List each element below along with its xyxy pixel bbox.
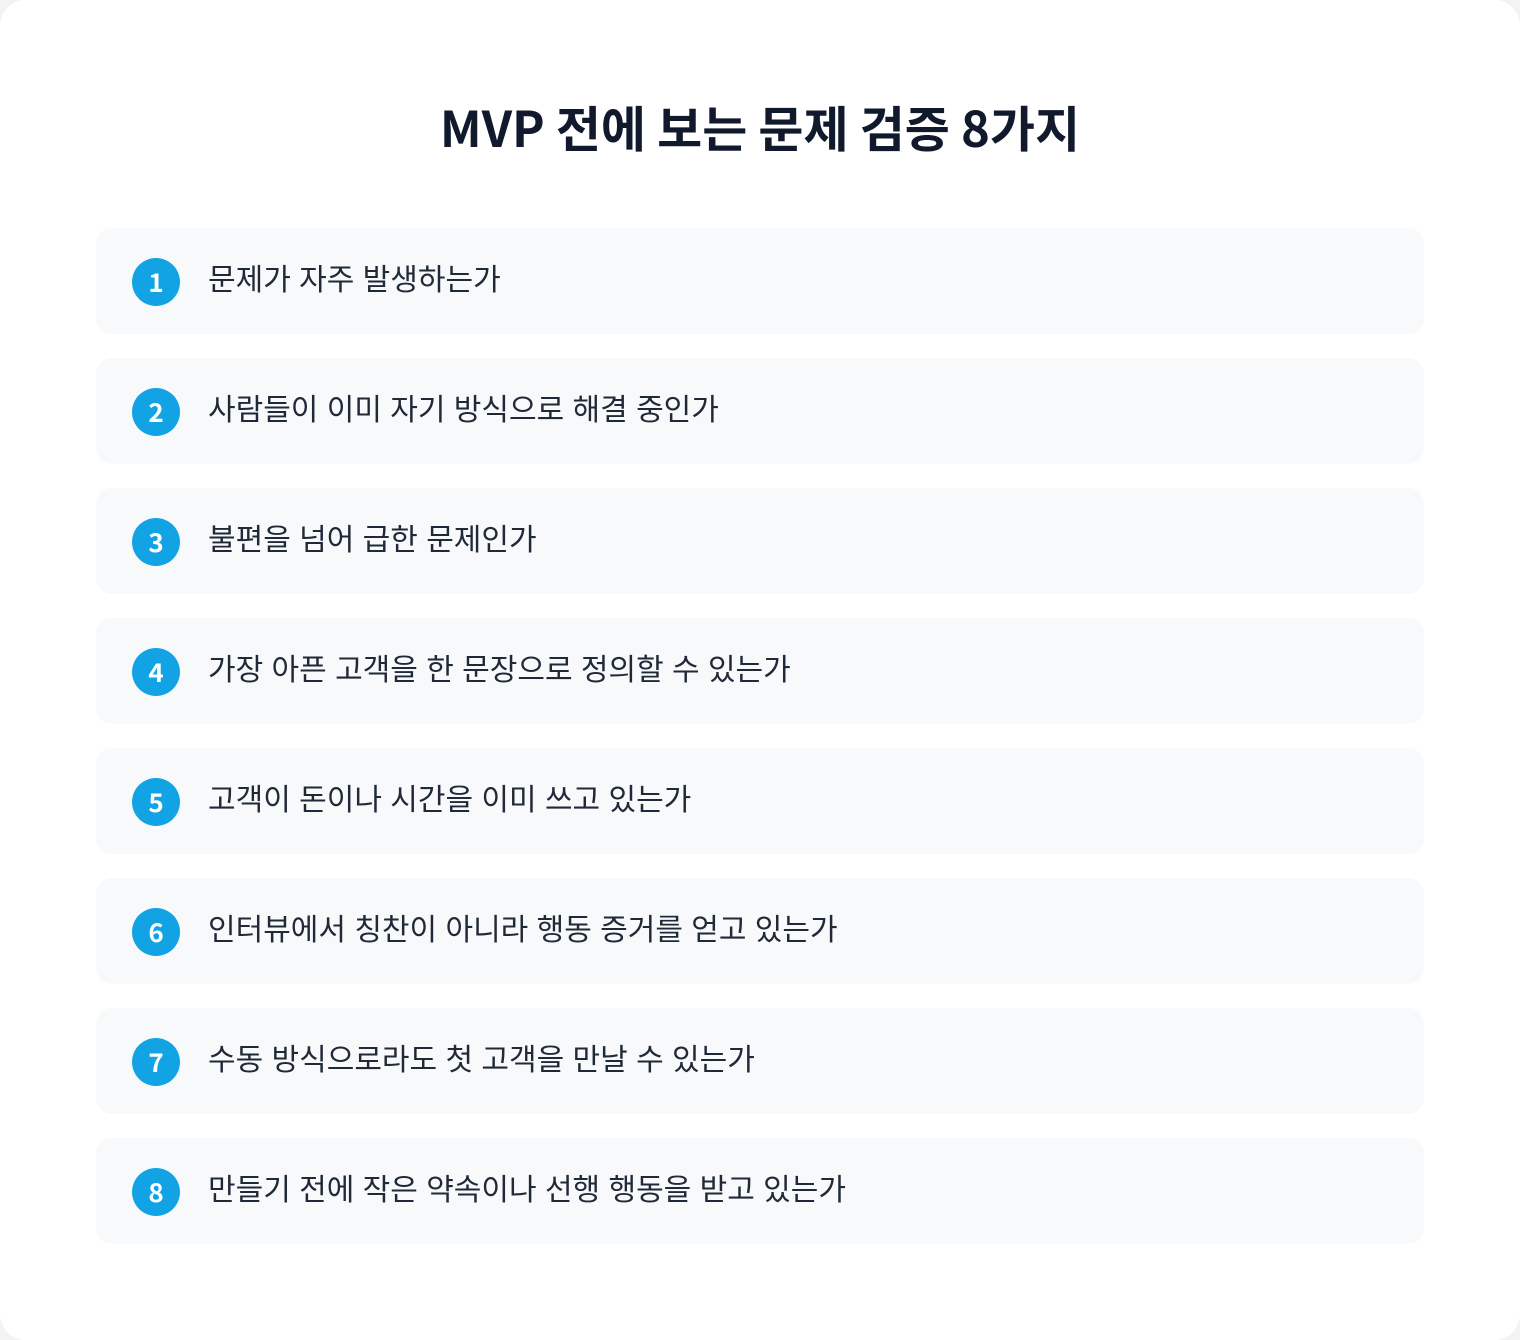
- item 5: 고객이 돈이나 시간을 이미 쓰고 있는가: [208, 784, 691, 817]
- item 7: 수동 방식으로라도 첫 고객을 만날 수 있는가: [208, 1044, 755, 1077]
- item 3: 3: [148, 523, 164, 560]
- item 6: [96, 878, 1424, 984]
- item 4: 4: [148, 653, 164, 690]
- item 4: [96, 618, 1424, 724]
- item 5: 5: [148, 783, 164, 820]
- item 1: 문제가 자주 발생하는가: [208, 264, 501, 297]
- item 2: 2: [148, 393, 164, 430]
- item 7: [96, 1008, 1424, 1114]
- item 2: [96, 358, 1424, 464]
- item 8: 만들기 전에 작은 약속이나 선행 행동을 받고 있는가: [208, 1174, 846, 1207]
- item 1: [96, 228, 1424, 334]
- item 8: 8: [148, 1173, 164, 1210]
- item 3: 불편을 넘어 급한 문제인가: [208, 524, 537, 557]
- item 8: [96, 1138, 1424, 1244]
- item 5: [96, 748, 1424, 854]
- item 7: 7: [148, 1043, 164, 1080]
- item 6: 인터뷰에서 칭찬이 아니라 행동 증거를 얻고 있는가: [208, 914, 838, 947]
- item 1: 1: [148, 263, 164, 300]
- item 2: 사람들이 이미 자기 방식으로 해결 중인가: [208, 394, 719, 427]
- item 6: 6: [148, 913, 164, 950]
- item 3: [96, 488, 1424, 594]
- item 4: 가장 아픈 고객을 한 문장으로 정의할 수 있는가: [208, 654, 791, 687]
- title: MVP 전에 보는 문제 검증 8가지: [440, 91, 1080, 162]
